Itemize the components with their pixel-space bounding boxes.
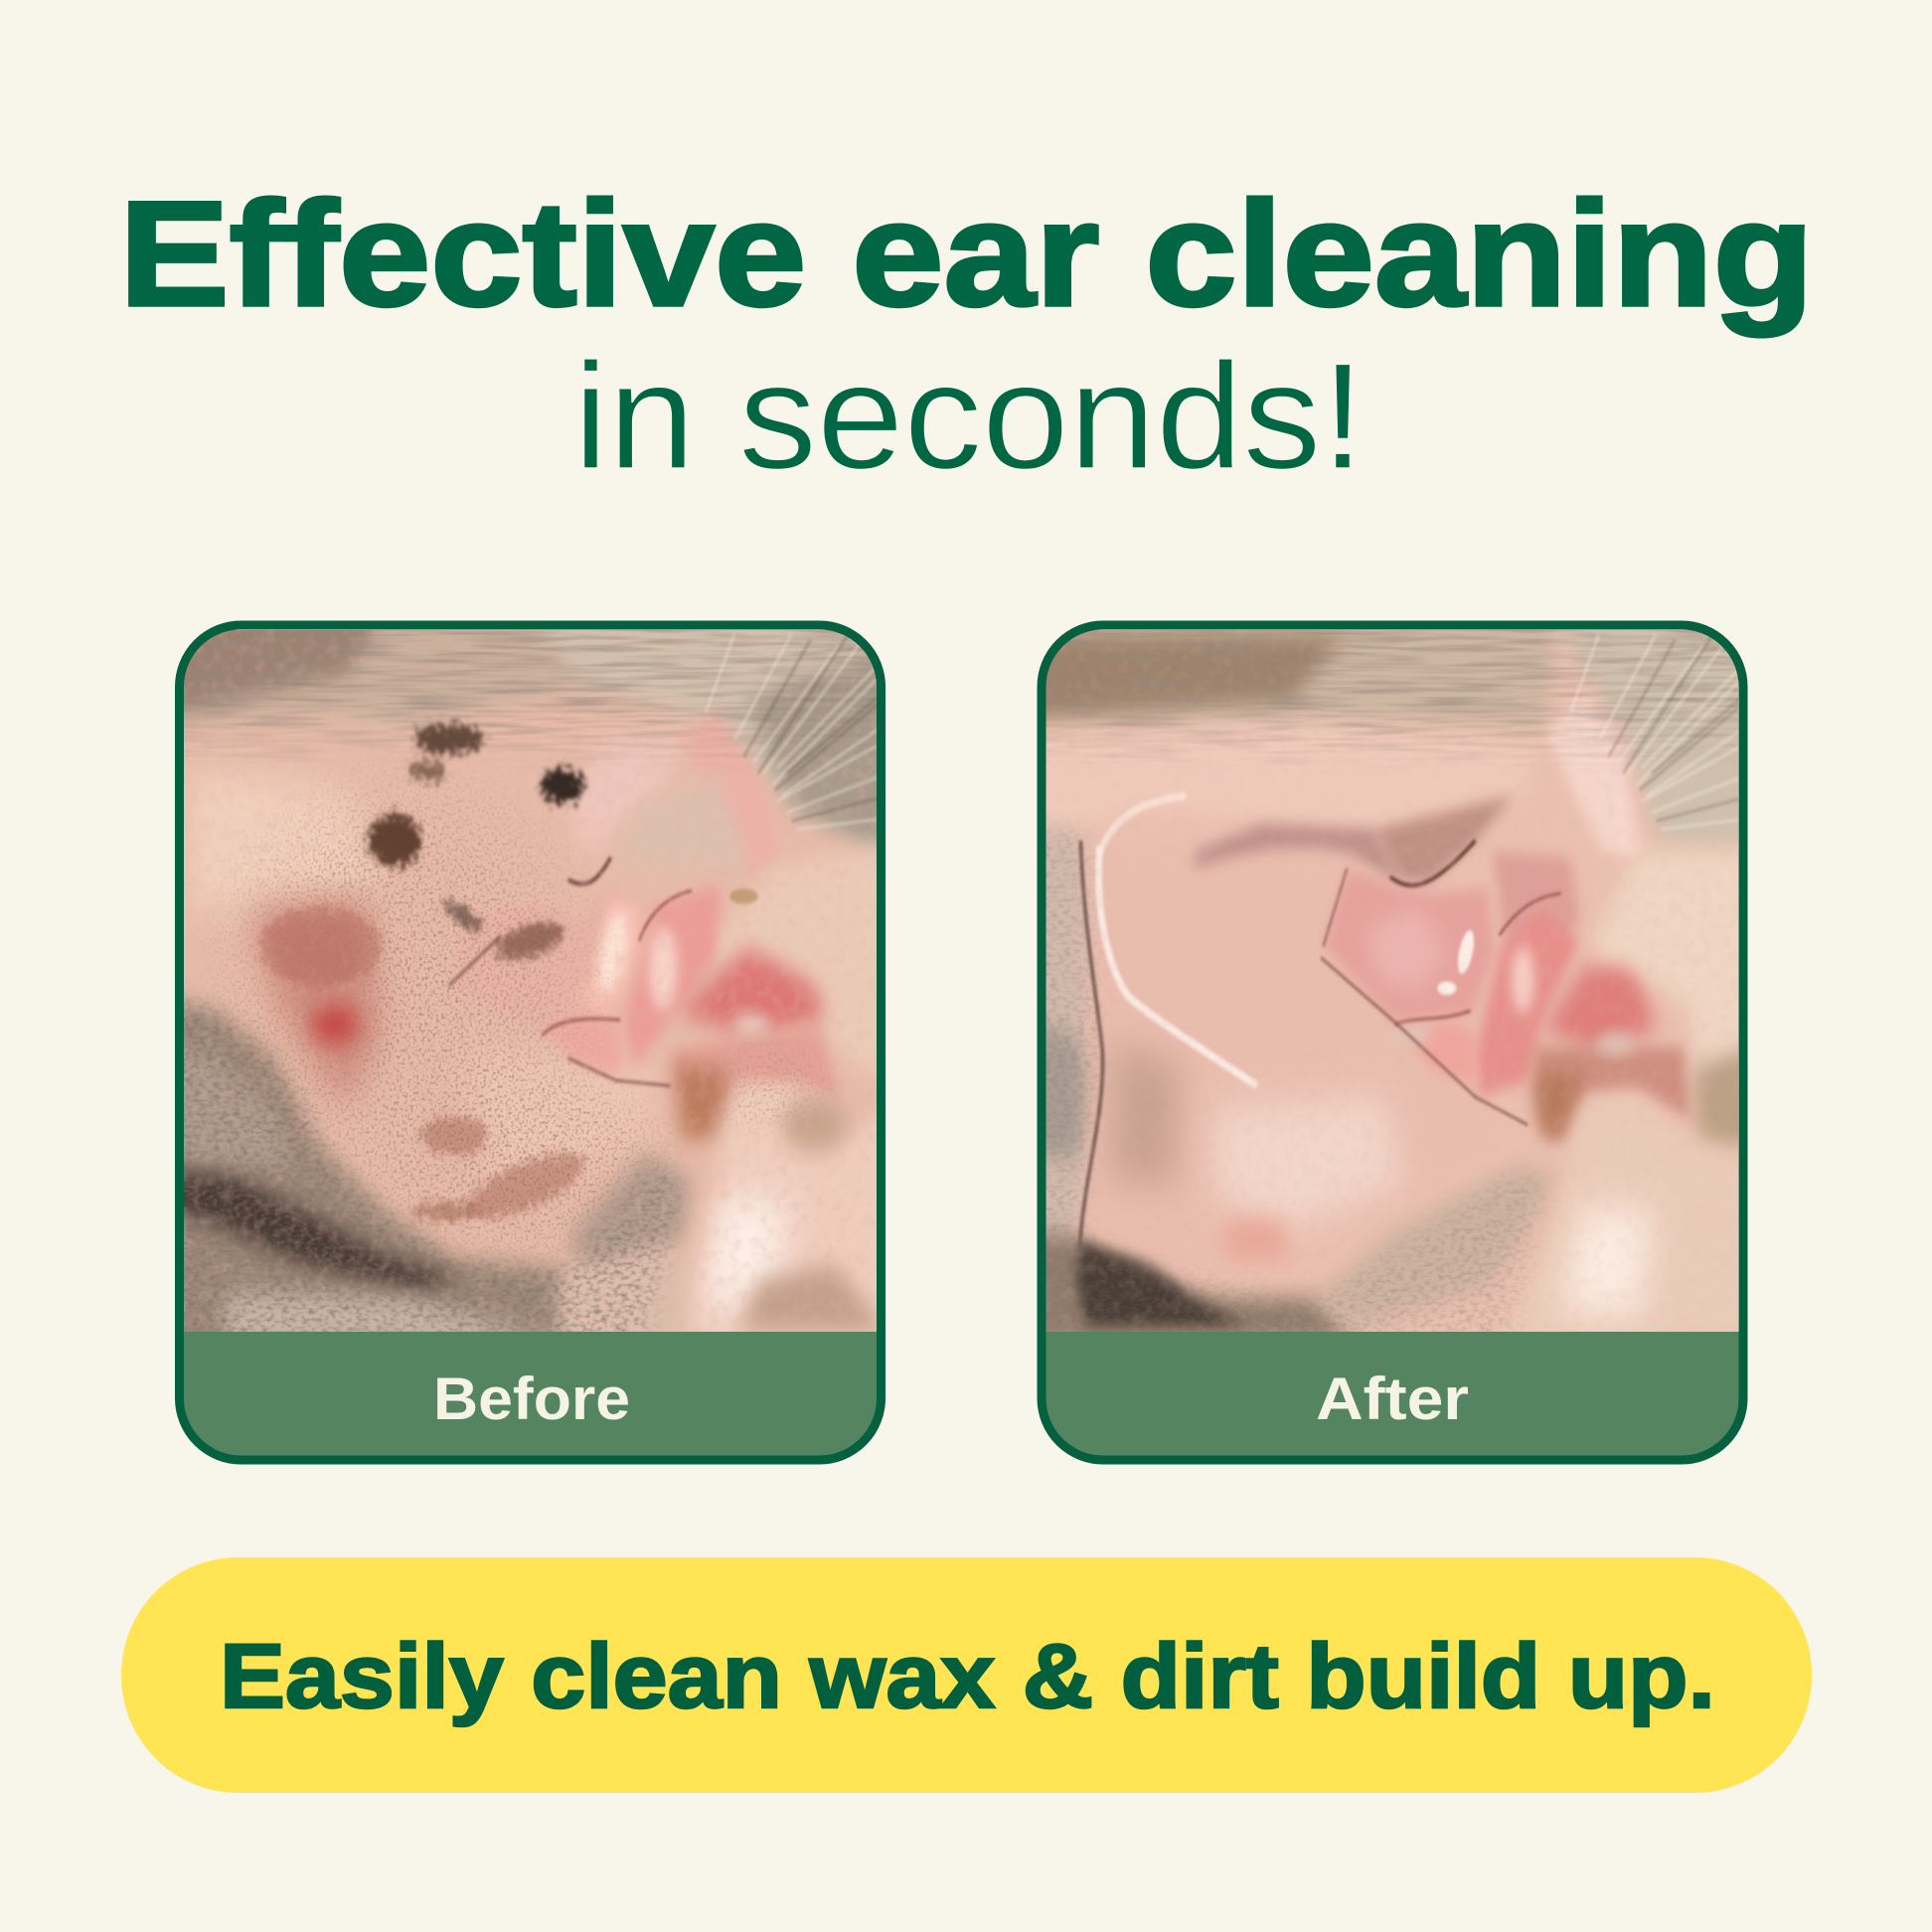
photo: ear before cleaning xyxy=(184,630,877,1332)
textures xyxy=(1024,606,1769,1387)
photo: ear after cleaning xyxy=(1046,630,1738,1332)
label: After: After xyxy=(1316,1366,1469,1432)
card border xyxy=(1042,625,1743,1460)
panel: after photo card xyxy=(1024,606,1769,1466)
panel: before photo card xyxy=(159,606,904,1466)
label bar: before xyxy=(184,1332,877,1455)
dirt patches xyxy=(258,724,589,1232)
canal xyxy=(1323,869,1495,1022)
main flap xyxy=(1076,940,1181,1286)
upper fold xyxy=(1046,729,1526,823)
left strip xyxy=(1046,823,1091,1236)
ridge lines xyxy=(1079,841,1103,1247)
card border xyxy=(179,625,881,1460)
callout text: Easily clean wax & dirt build up. xyxy=(220,1626,1715,1727)
title line 2: in seconds!: in seconds! xyxy=(573,332,1365,501)
label: Before: Before xyxy=(433,1366,630,1432)
callout pill xyxy=(121,1557,1812,1793)
top hair xyxy=(1046,630,1560,731)
canal xyxy=(454,886,649,1031)
label bar: after xyxy=(1038,1332,1748,1466)
hair strokes xyxy=(706,634,886,829)
lower fur xyxy=(184,990,572,1332)
textures xyxy=(184,630,877,1332)
right side xyxy=(1584,849,1738,1065)
title line 1: Effective ear cleaning: Effective ear cleaning xyxy=(119,170,1814,337)
hair strokes xyxy=(1570,634,1751,829)
top hair band xyxy=(184,630,588,735)
cheek xyxy=(188,768,383,918)
